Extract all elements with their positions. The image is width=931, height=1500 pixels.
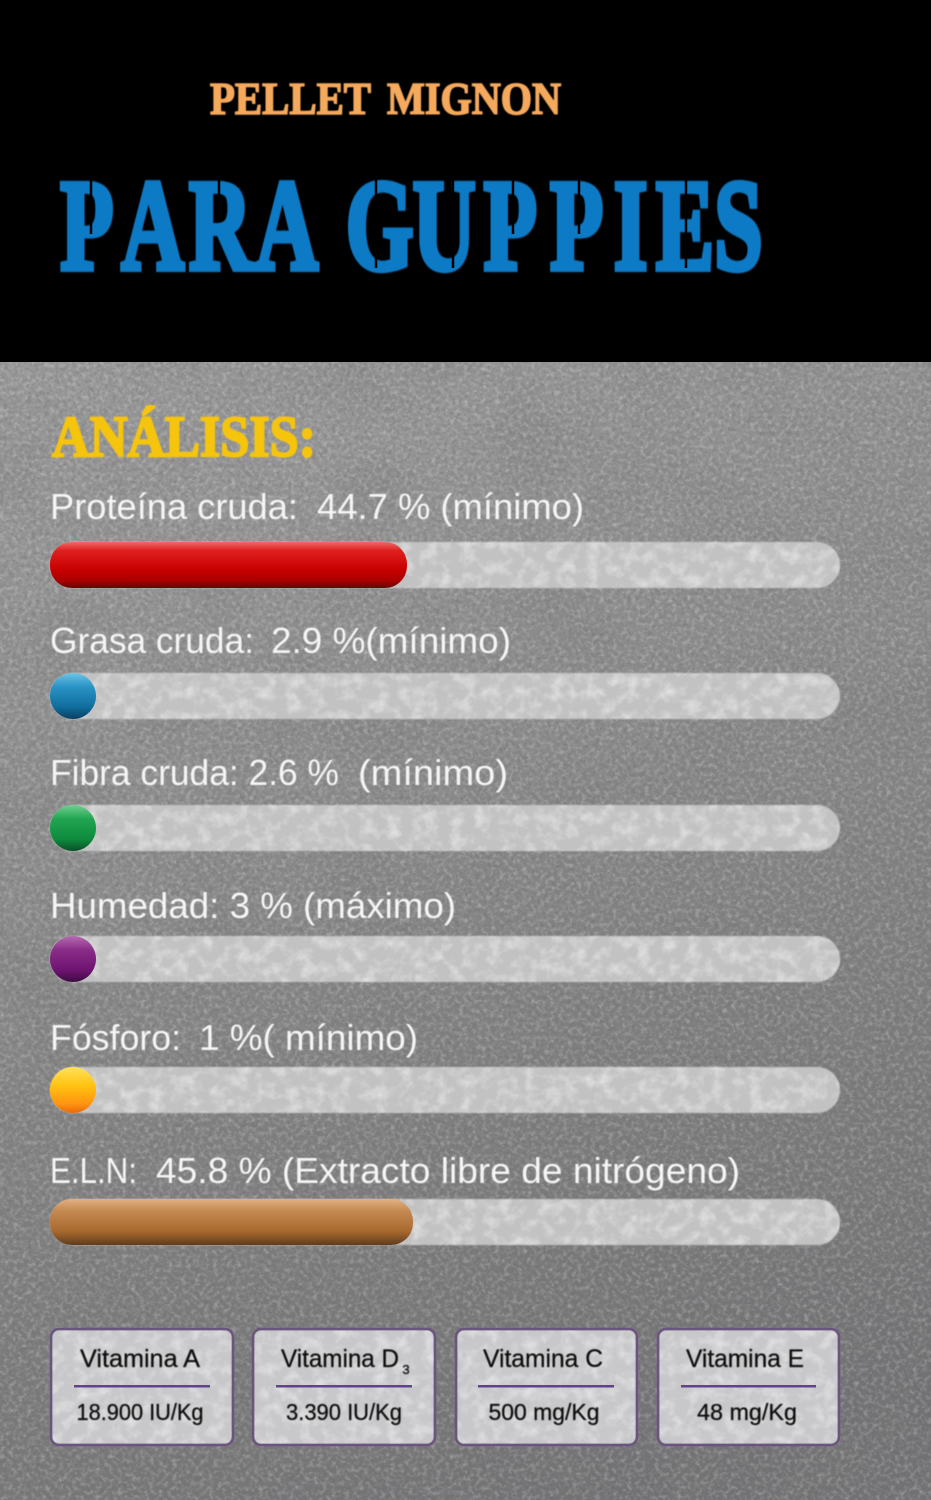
card: Vitamina E: 48 mg/Kg	[697, 1399, 797, 1425]
bar marker: purple ball	[50, 936, 96, 982]
title: Para Guppies: PARA GUPPIES	[60, 153, 763, 297]
bar group: Fibra cruda	[50, 752, 840, 851]
label: Fósforo	[50, 1017, 418, 1058]
panel: black header	[0, 0, 931, 362]
bar fill: 44.7 %	[50, 542, 407, 588]
heading: Análisis: ANÁLISIS:	[52, 404, 316, 469]
bar group: Humedad	[50, 885, 840, 982]
bar marker: blue ball	[50, 673, 96, 719]
bar marker: green ball	[50, 805, 96, 851]
bar track	[50, 673, 840, 719]
bar track	[50, 805, 840, 851]
bar track	[50, 1199, 840, 1245]
label: E.L.N: 45.8 % (Extracto libre de nitrógeno)	[156, 1150, 740, 1191]
label: Proteína cruda	[50, 486, 584, 527]
label: Fósforo: 1 %( mínimo)	[199, 1017, 418, 1058]
card: Vitamina E	[658, 1329, 839, 1445]
label: Fibra cruda: Fibra cruda: 2.6 %	[50, 752, 339, 793]
bar track	[50, 1067, 840, 1113]
label: Fibra cruda: (mínimo)	[358, 752, 508, 793]
bar track	[50, 936, 840, 982]
heading: Pellet Mignon: MIGNON	[387, 74, 561, 124]
bar fill: 45.8 %	[50, 1199, 413, 1245]
heading: Pellet Mignon: PELLET	[210, 74, 371, 124]
card: Vitamina D3: 3	[402, 1362, 410, 1377]
bar group: Grasa cruda	[50, 620, 840, 719]
heading: Pellet Mignon	[210, 74, 561, 124]
bar group: E.L.N	[50, 1150, 840, 1245]
panel: textured grey background	[0, 362, 931, 1500]
card: Vitamina A: 18.900 IU/Kg	[76, 1399, 204, 1425]
label: Humedad: Humedad: 3 % (máximo)	[50, 885, 456, 926]
label: Fósforo: Fósforo:	[50, 1017, 181, 1058]
label: Fibra cruda	[50, 752, 508, 793]
bar group: Fósforo	[50, 1017, 840, 1113]
card: Vitamina C: Vitamina C	[483, 1345, 603, 1373]
card: Vitamina A: Vitamina A	[80, 1345, 200, 1373]
label: Grasa cruda: Grasa cruda:	[50, 620, 254, 661]
bar track	[50, 542, 840, 588]
card: Vitamina E: Vitamina E	[686, 1345, 804, 1373]
label: Proteína cruda: Proteína cruda:	[50, 486, 298, 527]
card: Vitamina A	[51, 1329, 233, 1445]
label: Grasa cruda	[50, 620, 511, 661]
card: Vitamina C	[456, 1329, 637, 1445]
label: Proteína cruda: 44.7 % (mínimo)	[317, 486, 584, 527]
label: Grasa cruda: 2.9 %(mínimo)	[271, 620, 511, 661]
card: Vitamina C: 500 mg/Kg	[488, 1399, 600, 1425]
card: Vitamina D3	[253, 1329, 435, 1445]
card: Vitamina D3: Vitamina D	[281, 1345, 399, 1373]
bar group: Proteína cruda	[50, 486, 840, 588]
card: Vitamina D3: 3.390 IU/Kg	[286, 1399, 402, 1425]
label: E.L.N: E.L.N:	[50, 1150, 137, 1191]
bar marker: yellow ball	[50, 1067, 96, 1113]
